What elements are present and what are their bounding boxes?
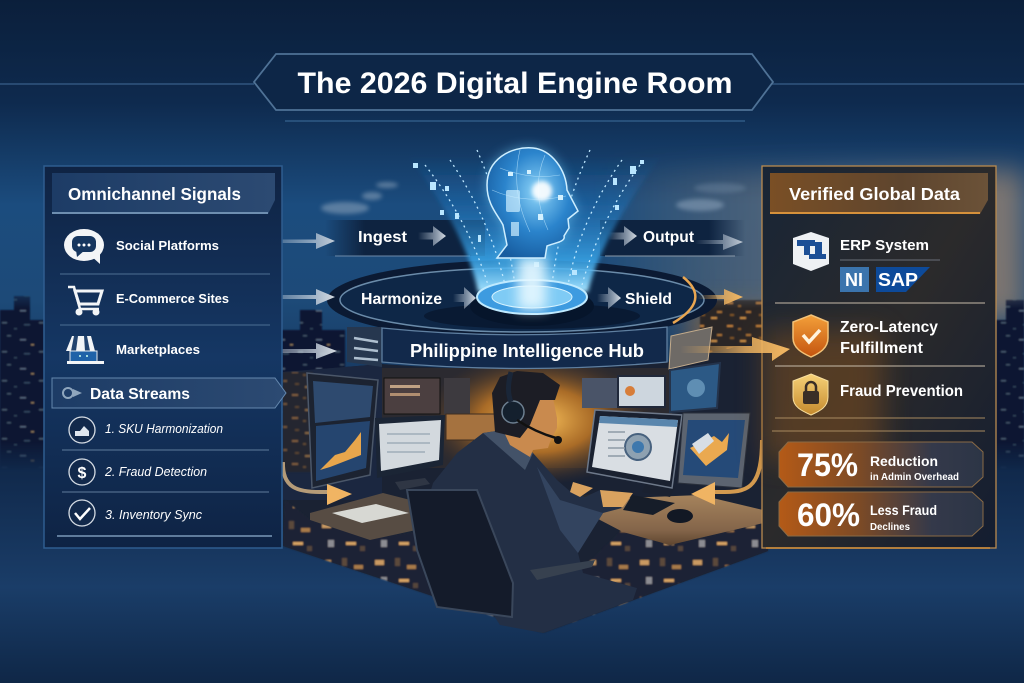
logo: SAP: SAP — [878, 270, 918, 290]
flow band: output: Output — [643, 229, 695, 246]
stream: fraud detection — [69, 459, 207, 485]
logo: SAP — [876, 267, 930, 292]
panel header — [770, 173, 988, 214]
control room scene with operator — [283, 327, 768, 633]
row: marketplaces — [66, 336, 200, 364]
icon: ERP logo — [793, 232, 829, 271]
panel: verified global data — [762, 166, 996, 548]
stream: inventory sync — [69, 500, 203, 526]
hub label plate: Philippine Intelligence Hub — [410, 341, 644, 361]
stat: 75 percent: in Admin Overhead — [870, 471, 959, 483]
flow band: ingest: Ingest — [358, 229, 408, 246]
flow band: ingest — [325, 220, 485, 256]
operator hands — [570, 482, 633, 507]
center hub: holographic head and platform: Shield — [625, 291, 672, 308]
stat: 75 percent: Reduction — [870, 453, 938, 469]
stat: 60 percent: 60% — [797, 497, 860, 533]
stream: fraud detection: $ — [78, 465, 87, 482]
icon: lock shield — [793, 374, 828, 415]
right second monitor — [678, 413, 750, 488]
row: fraud prevention: Fraud Prevention — [840, 383, 963, 400]
arrows to right panel — [695, 234, 743, 305]
stream: fraud detection: 2. Fraud Detection — [104, 465, 207, 479]
icon: chat bubble — [64, 229, 104, 264]
background wall screens — [384, 327, 720, 440]
operator head and headset — [492, 371, 562, 457]
building windows below desk — [283, 500, 768, 633]
panel header: Verified Global Data — [789, 184, 960, 204]
row: zero-latency fulfillment: Zero-Latency — [840, 319, 938, 336]
center hub: holographic head and platform — [325, 148, 745, 368]
row: social platforms — [64, 229, 219, 264]
icon: shopping cart — [68, 287, 102, 316]
row: e-commerce sites: E-Commerce Sites — [116, 291, 229, 306]
curved arrow right — [691, 440, 762, 505]
row: social platforms: Social Platforms — [116, 238, 219, 253]
stat: 75 percent — [779, 442, 983, 487]
stream: SKU harmonization — [69, 417, 223, 443]
arrow: harmonize to core — [453, 287, 476, 309]
title text: The 2026 Digital Engine Room — [298, 67, 732, 100]
hub label plate — [347, 327, 667, 368]
stat: 60 percent: Less Fraud — [870, 502, 937, 518]
center hub: holographic head and platform: Harmonize — [361, 291, 442, 308]
data streams header — [52, 378, 286, 408]
papers on desk — [332, 504, 409, 523]
row: zero-latency fulfillment: Fulfillment — [840, 340, 923, 357]
row: marketplaces: Marketplaces — [116, 342, 200, 357]
panel: omnichannel signals — [44, 166, 286, 548]
stream: SKU harmonization: 1. SKU Harmonization — [105, 422, 223, 436]
icon: holographic head — [487, 148, 578, 258]
title banner — [254, 54, 773, 121]
icon: storefront — [66, 336, 104, 364]
operator chair — [407, 490, 595, 617]
logo: NI — [840, 267, 869, 292]
stream: inventory sync: 3. Inventory Sync — [105, 508, 203, 522]
data streams header: Data Streams — [90, 386, 190, 403]
row: zero-latency fulfillment — [793, 315, 938, 357]
operator body — [425, 430, 637, 633]
right main monitor — [587, 410, 682, 497]
arrows from left panel — [240, 233, 337, 359]
panel header: Omnichannel Signals — [68, 184, 241, 204]
row: e-commerce sites — [68, 287, 229, 316]
arrow: core to shield — [597, 287, 621, 309]
stat: 60 percent — [779, 492, 983, 536]
platform rings — [327, 260, 717, 340]
curved arrow left — [283, 462, 352, 505]
row: fraud prevention — [793, 374, 963, 415]
holographic pedestal — [470, 255, 594, 326]
flow band: output — [600, 220, 745, 256]
arrow: hub to zero-latency fulfillment — [680, 337, 790, 361]
keyboard and mouse — [575, 490, 693, 523]
row: ERP system: ERP System — [840, 237, 929, 254]
light cone with data particles — [408, 150, 662, 292]
row: ERP system — [793, 232, 940, 292]
logo: NI: NI — [845, 270, 863, 290]
desk right — [575, 495, 768, 545]
left monitor — [307, 373, 378, 488]
desk left — [310, 493, 430, 540]
panel header — [52, 173, 275, 214]
stat: 75 percent: 75% — [797, 447, 858, 483]
icon: orange shield — [793, 315, 828, 357]
stat: 60 percent: Declines — [870, 521, 910, 533]
center-left monitor — [375, 415, 445, 490]
